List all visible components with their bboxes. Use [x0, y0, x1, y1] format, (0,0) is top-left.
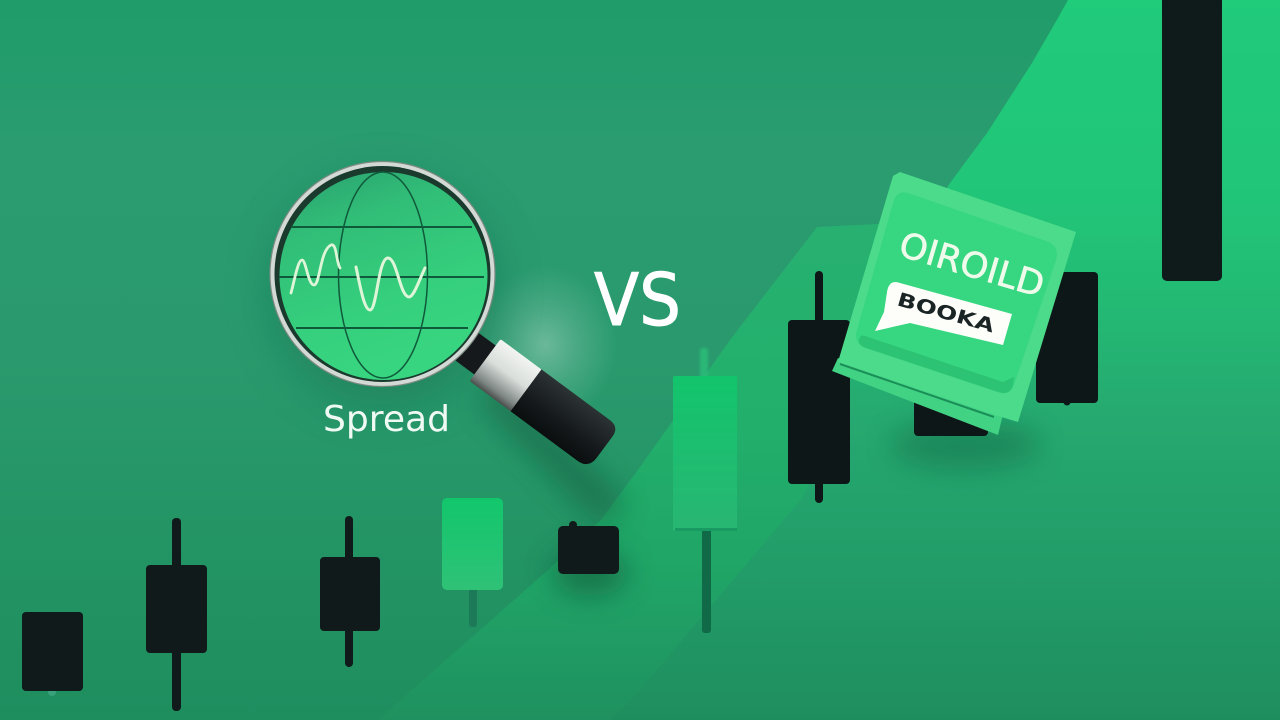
- rising band: [378, 220, 960, 720]
- book title: OIROILD: [894, 225, 1049, 306]
- speech bubble: [875, 282, 1012, 345]
- Spread label: Spread: [323, 399, 450, 440]
- magnifier lens: [270, 162, 495, 386]
- cover: [838, 172, 1076, 422]
- candlestick 6 green: [673, 348, 737, 633]
- order book icon: [832, 172, 1076, 435]
- inner panel: [856, 192, 1057, 393]
- VS heading: VS: [594, 258, 681, 342]
- candlestick 8: [890, 385, 1040, 469]
- candlestick 9: [1036, 272, 1098, 406]
- magnifying glass icon: [270, 162, 619, 469]
- bright swoosh: [610, 0, 1280, 720]
- candlestick 3: [320, 516, 380, 667]
- bubble text: BOOKA: [895, 289, 997, 337]
- handle cast shadow: [500, 400, 605, 505]
- candlestick 10: [1162, 0, 1222, 281]
- candlestick 5: [552, 521, 628, 596]
- glow behind handle: [473, 265, 617, 425]
- panel lower strip: [859, 336, 1014, 393]
- lower sheet: [832, 358, 1003, 435]
- candlestick 7: [788, 271, 850, 503]
- candlestick 1: [22, 612, 83, 696]
- candlestick 2: [146, 518, 207, 711]
- candlestick 4 green: [442, 498, 503, 627]
- magnifier handle: [449, 324, 619, 469]
